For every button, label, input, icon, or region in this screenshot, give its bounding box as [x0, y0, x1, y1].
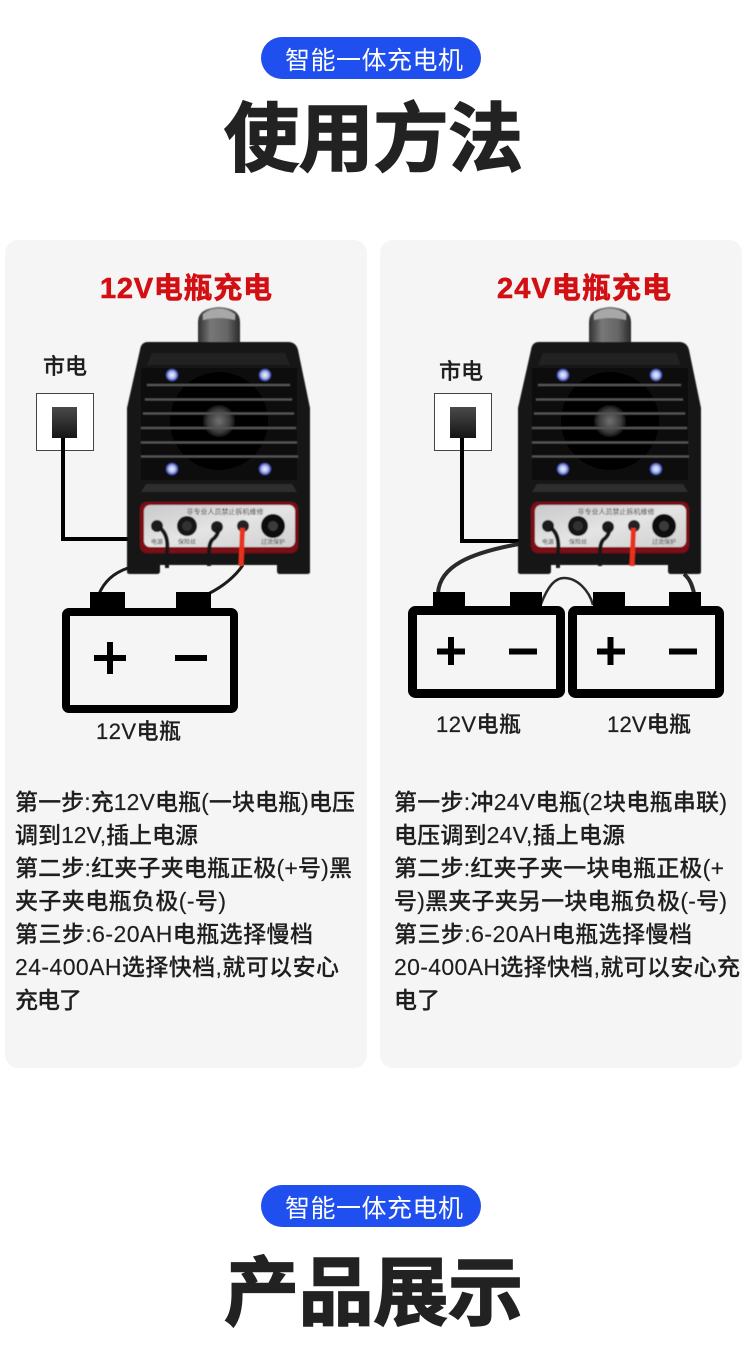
tag pill: top: 智能一体充电机	[285, 47, 463, 75]
steps text: 第一步:充12V电瓶(一块电瓶)电压	[15, 789, 355, 815]
label: battery right: 12V电瓶	[607, 712, 691, 737]
steps text: 第三步:6-20AH电瓶选择慢档	[15, 921, 313, 947]
steps text: 第三步:6-20AH电瓶选择慢档	[394, 921, 692, 947]
steps text: 第二步:红夹子夹电瓶正极(+号)黑	[15, 855, 352, 881]
charger unit	[518, 307, 701, 574]
heading: 12V: 12V电瓶充电	[100, 272, 272, 305]
icon: battery right	[572, 592, 720, 694]
heading: 24V: 24V电瓶充电	[497, 272, 671, 305]
icon: battery	[66, 592, 234, 709]
steps text: 第一步:冲24V电瓶(2块电瓶串联)	[394, 789, 727, 815]
icon: battery left	[412, 592, 560, 694]
panel: 24V charging	[380, 240, 742, 1068]
label: battery: 12V电瓶	[96, 719, 181, 744]
battery leads	[438, 544, 694, 605]
title: usage: 使用方法	[224, 97, 523, 181]
tag pill: bottom: 智能一体充电机	[285, 1195, 463, 1223]
title: product display: 产品展示	[224, 1251, 523, 1335]
panel: 12V charging	[5, 240, 367, 1068]
charger unit	[127, 307, 310, 574]
steps text: 充电了	[15, 987, 82, 1013]
steps text	[394, 789, 740, 1013]
tag pill: top	[261, 37, 481, 79]
steps text: 号)黑夹子夹另一块电瓶负极(-号)	[394, 888, 727, 914]
steps text: 夹子夹电瓶负极(-号)	[15, 888, 226, 914]
label: mains: 市电	[43, 354, 87, 379]
steps text: 调到12V,插上电源	[15, 822, 198, 848]
icon: wall socket and cord	[36, 394, 128, 539]
icon: wall socket and cord	[434, 394, 526, 541]
tag pill: bottom	[261, 1185, 481, 1227]
steps text: 第二步:红夹子夹一块电瓶正极(+	[394, 855, 724, 881]
steps text: 24-400AH选择快档,就可以安心	[15, 954, 339, 980]
steps text: 电压调到24V,插上电源	[394, 822, 625, 848]
label: battery left: 12V电瓶	[436, 712, 521, 737]
steps text	[15, 789, 355, 1013]
battery leads	[99, 565, 243, 594]
label: mains: 市电	[439, 359, 483, 384]
steps text: 电了	[394, 987, 440, 1013]
steps text: 20-400AH选择快档,就可以安心充	[394, 954, 740, 980]
